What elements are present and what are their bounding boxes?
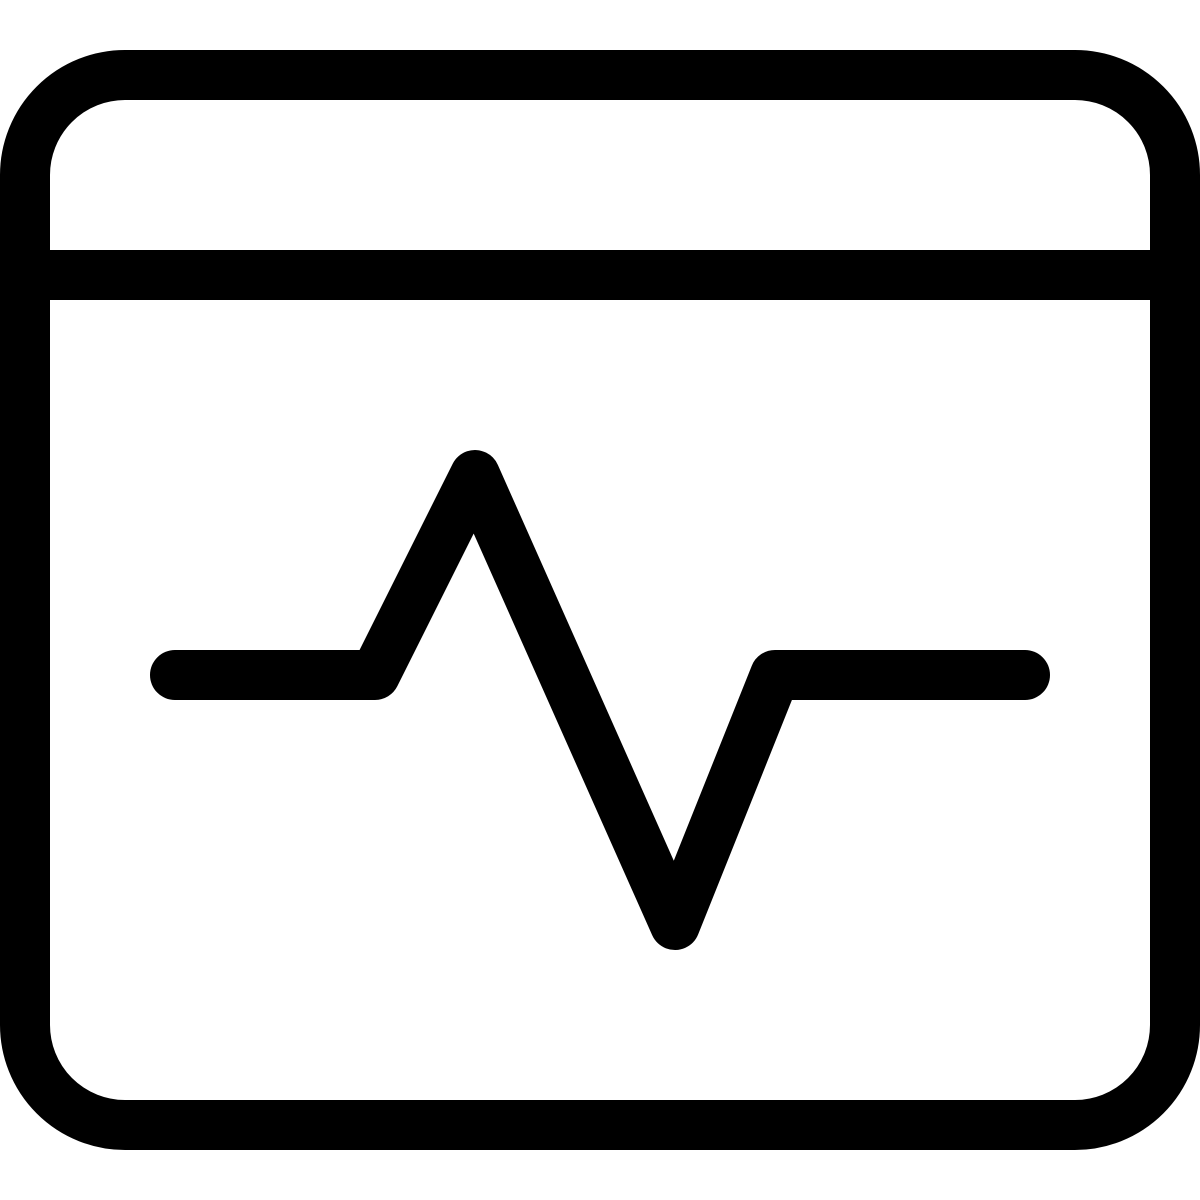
pulse line [175,475,1025,925]
window title bar divider [25,250,1175,300]
